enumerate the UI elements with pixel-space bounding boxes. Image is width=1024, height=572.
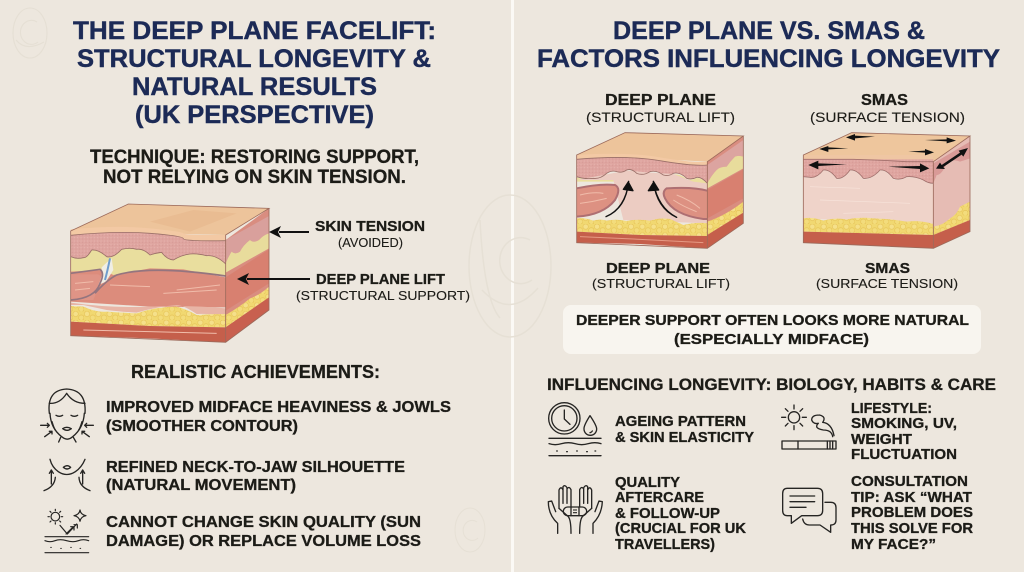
arrows: surface tension [808, 134, 968, 172]
text: limits [106, 514, 421, 550]
callout: deeper support [563, 305, 981, 354]
icon: sun and cigarette [782, 405, 836, 449]
arrow: deep plane lift [247, 278, 310, 280]
title: FACTORS INFLUENCING LONGEVITY [537, 45, 1000, 73]
arrow: lift right [648, 181, 677, 217]
label: smas top [810, 92, 965, 125]
callout: deeper support: DEEPER SUPPORT OFTEN LOOKS MORE NATURAL [576, 312, 969, 329]
skin diagram: smas surface tension [803, 133, 970, 248]
label: smas top: (SURFACE TENSION) [810, 109, 965, 125]
skin diagram: deep plane cross-section [71, 204, 269, 342]
label: deep plane bottom: (STRUCTURAL LIFT) [592, 276, 730, 291]
heading: influencing longevity: INFLUENCING LONGEVITY: BIOLOGY, HABITS & CARE [547, 375, 996, 394]
panel: right [537, 17, 1000, 553]
text: consultation tip: MY FACE?” [851, 537, 936, 553]
text: consultation tip: PROBLEM DOES [851, 505, 973, 521]
subtitle: technique [90, 147, 419, 188]
callout: deeper support: (ESPECIALLY MIDFACE) [674, 331, 869, 348]
title [73, 17, 436, 129]
label: skin tension [315, 218, 425, 250]
label: deep plane bottom [592, 260, 730, 291]
title: THE DEEP PLANE FACELIFT: [73, 17, 436, 45]
title [537, 17, 1000, 73]
text: lifestyle: WEIGHT [851, 432, 912, 448]
label: smas bottom [816, 260, 958, 291]
panel: left [41, 17, 470, 553]
label: smas bottom: (SURFACE TENSION) [816, 276, 958, 291]
icon: face [41, 389, 93, 442]
text: consultation tip [851, 474, 974, 553]
icon: neck and jaw [44, 459, 90, 491]
arrow: lift left [606, 181, 633, 217]
watermark: bottom seal [455, 508, 485, 552]
text: limits: DAMAGE) OR REPLACE VOLUME LOSS [106, 533, 421, 550]
text: neck to jaw: (NATURAL MOVEMENT) [106, 477, 296, 494]
arrow: skin tension [279, 231, 309, 233]
text: limits: CANNOT CHANGE SKIN QUALITY (SUN [106, 514, 421, 531]
text: lifestyle: FLUCTUATION [851, 447, 957, 463]
icon: speech bubbles [783, 488, 836, 532]
heading: realistic achievements: REALISTIC ACHIEVEMENTS: [131, 362, 380, 382]
text: neck to jaw: REFINED NECK-TO-JAW SILHOUETTE [106, 459, 405, 476]
text: midface: (SMOOTHER CONTOUR) [106, 418, 298, 435]
icon: ageing clock and skin [549, 403, 601, 456]
title: (UK PERSPECTIVE) [135, 101, 374, 129]
text: aftercare: QUALITY [615, 475, 680, 491]
label: skin tension: SKIN TENSION [315, 218, 425, 235]
label: deep plane top: DEEP PLANE [605, 92, 716, 109]
text: lifestyle: SMOKING, UV, [851, 416, 957, 432]
title: STRUCTURAL LONGEVITY & [77, 45, 431, 73]
text: aftercare: (CRUCIAL FOR UK [615, 521, 747, 537]
text: ageing: & SKIN ELASTICITY [615, 430, 754, 446]
label: deep plane lift: (STRUCTURAL SUPPORT) [296, 288, 470, 303]
text: neck to jaw [106, 459, 405, 494]
subtitle: technique: NOT RELYING ON SKIN TENSION. [103, 167, 406, 188]
text: ageing: AGEING PATTERN [615, 414, 746, 430]
label: deep plane lift [296, 271, 470, 303]
text: midface [106, 399, 451, 435]
text: lifestyle: LIFESTYLE: [851, 401, 932, 417]
text: aftercare [615, 475, 747, 553]
icon: sun damage [45, 509, 89, 553]
label: skin tension: (AVOIDED) [338, 235, 403, 250]
text: aftercare: & FOLLOW-UP [615, 506, 720, 522]
title: NATURAL RESULTS [132, 73, 377, 101]
watermark: top left seal [13, 8, 47, 58]
text: aftercare: TRAVELLERS) [615, 537, 715, 553]
subtitle: technique: TECHNIQUE: RESTORING SUPPORT, [90, 147, 419, 168]
label: deep plane lift: DEEP PLANE LIFT [316, 271, 445, 288]
skin diagram: deep plane structural lift [577, 133, 743, 248]
label: smas top: SMAS [861, 92, 908, 109]
label: deep plane bottom: DEEP PLANE [606, 260, 710, 277]
text: consultation tip: THIS SOLVE FOR [851, 521, 974, 537]
text: lifestyle [851, 401, 957, 463]
icon: hands and plaster [548, 486, 602, 533]
title: DEEP PLANE VS. SMAS & [613, 17, 925, 45]
text: aftercare: AFTERCARE [615, 490, 704, 506]
text: midface: IMPROVED MIDFACE HEAVINESS & JOWLS [106, 399, 451, 416]
text: ageing [615, 414, 754, 446]
label: deep plane top: (STRUCTURAL LIFT) [586, 109, 735, 125]
watermark: centre seal [469, 195, 551, 337]
text: consultation tip: TIP: ASK “WHAT [851, 490, 972, 506]
text: consultation tip: CONSULTATION [851, 474, 968, 490]
label: smas bottom: SMAS [865, 260, 910, 277]
label: deep plane top [586, 92, 735, 125]
